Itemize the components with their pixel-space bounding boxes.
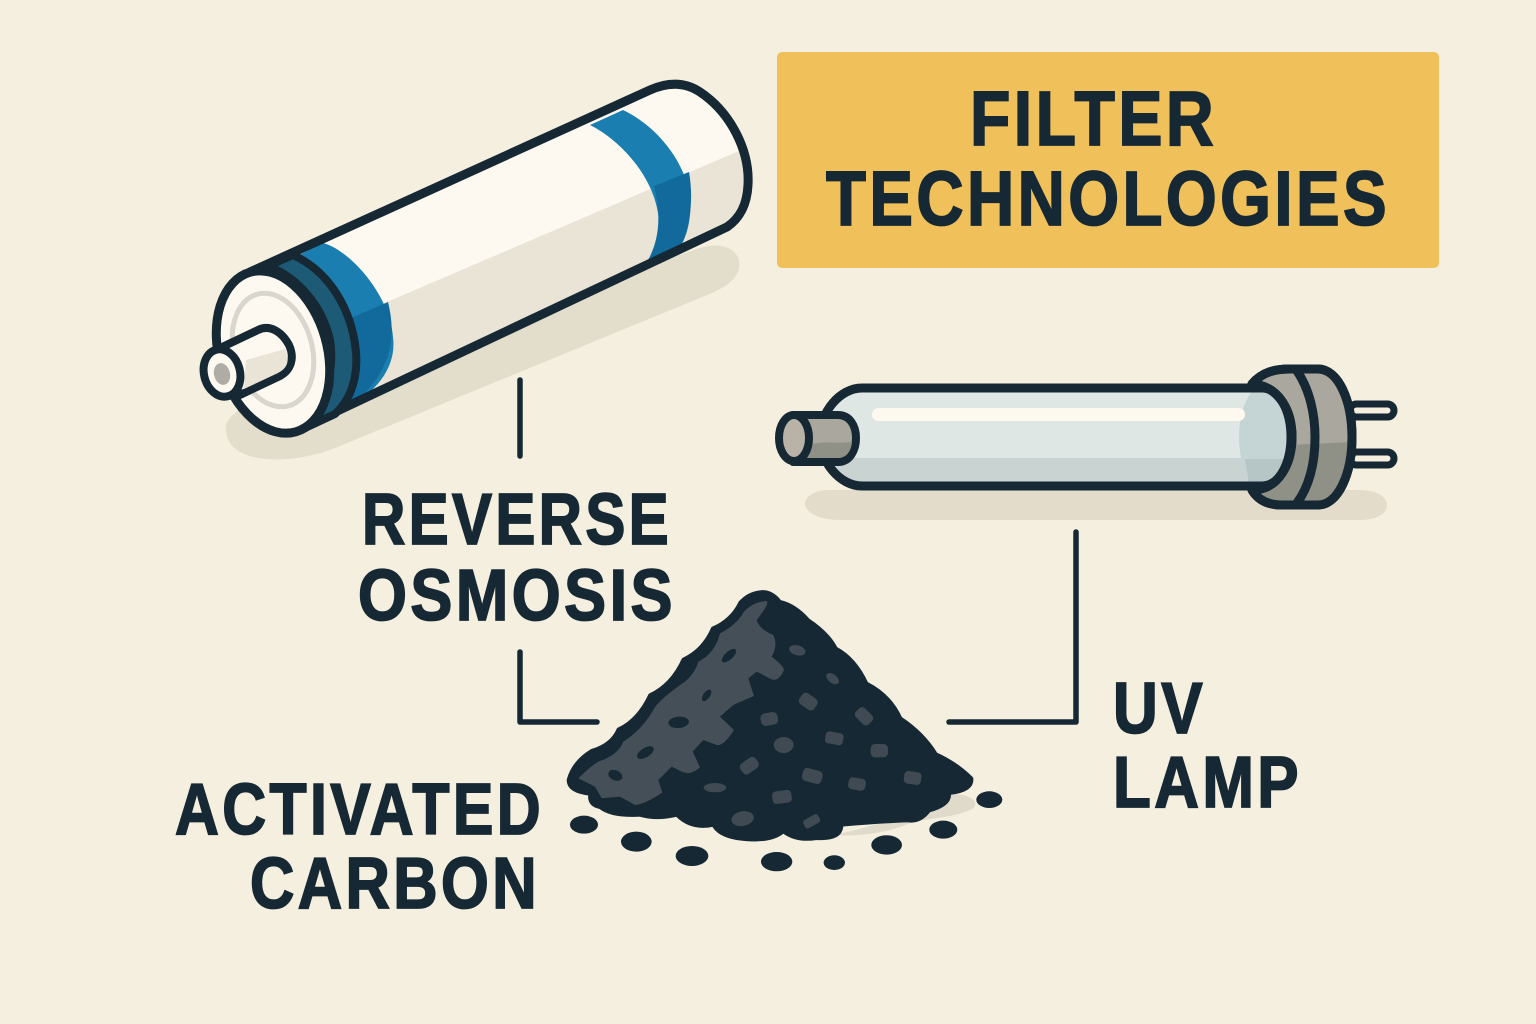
title banner: [777, 52, 1439, 268]
connector: reverse osmosis upper: [517, 380, 523, 456]
label: UV lamp: UV: [1113, 669, 1206, 749]
glass tube: [832, 392, 1286, 482]
dark flecks on highlighted side: [607, 647, 738, 783]
label: activated carbon: CARBON: [250, 844, 540, 924]
title banner: TECHNOLOGIES: [826, 156, 1390, 242]
icon: activated carbon pile: [568, 592, 1002, 871]
lamp shadow: [805, 490, 1387, 520]
lamp pins: [1350, 404, 1394, 417]
label: activated carbon: [175, 770, 544, 924]
connector: UV lamp to carbon: [949, 532, 1076, 722]
label: reverse osmosis: REVERSE: [362, 480, 672, 560]
connector: reverse osmosis to carbon: [520, 652, 597, 722]
pile silhouette: [568, 592, 972, 840]
dark collar: [268, 255, 356, 428]
label: reverse osmosis: OSMOSIS: [358, 556, 676, 636]
pile shadow: [833, 794, 975, 835]
icon: UV lamp: [779, 369, 1394, 520]
grey granules on dark side: [704, 643, 922, 830]
title banner: FILTER: [970, 76, 1217, 162]
label: reverse osmosis: [358, 480, 676, 636]
end face: [198, 257, 348, 447]
pile highlighted side: [578, 601, 784, 805]
scattered carbon granules: [570, 791, 1002, 871]
cartridge body: [300, 89, 744, 400]
cartridge shadow: [226, 245, 739, 459]
lamp nub: [793, 415, 856, 462]
label: UV lamp: [1113, 669, 1302, 823]
icon: reverse osmosis membrane cartridge: [200, 80, 753, 460]
label: UV lamp: LAMP: [1113, 743, 1302, 823]
inner ring: [220, 283, 326, 417]
label: activated carbon: ACTIVATED: [175, 770, 544, 850]
lamp end cap: [1252, 369, 1352, 505]
centre tube: [218, 328, 292, 395]
